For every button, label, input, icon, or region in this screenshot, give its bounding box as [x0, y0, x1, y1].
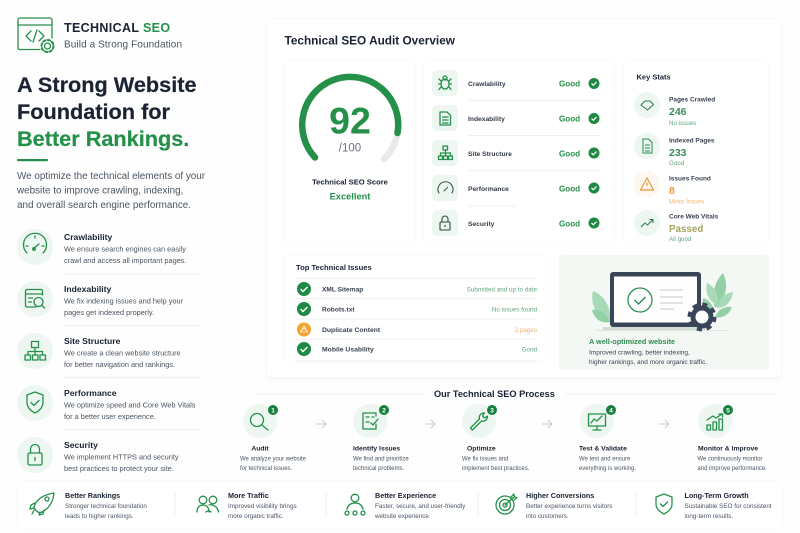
benefit: better experience: website experience.	[374, 513, 431, 520]
panel: score gauge: 92	[329, 100, 371, 142]
stat: pages crawled: 246	[669, 106, 687, 118]
feature: performance: Performance	[64, 388, 117, 398]
stat: core web vitals: All good	[669, 236, 692, 243]
step: audit: for technical issues.	[240, 466, 292, 472]
logo	[18, 18, 182, 52]
stat: core web vitals	[634, 210, 719, 243]
brand name: TECHNICAL SEO	[64, 21, 170, 35]
benefit: more traffic: Improved visibility brings	[228, 503, 297, 510]
row: security	[432, 210, 600, 236]
benefit: long-term growth: long-term results.	[684, 513, 733, 520]
benefit: long-term growth	[656, 491, 772, 520]
step: audit: We analyze your website	[240, 456, 307, 462]
heading: Foundation for	[17, 99, 171, 124]
row: site structure	[432, 140, 600, 166]
step: test and validate: Test & Validate	[579, 446, 627, 452]
step: identify issues: We find and prioritize	[353, 456, 409, 462]
issue: duplicate content	[297, 322, 537, 336]
panel: key stats: Key Stats	[636, 72, 671, 82]
step: optimize: implement best practices.	[462, 466, 530, 472]
step: identify issues: Identify Issues	[353, 446, 400, 452]
stat: pages crawled	[634, 92, 715, 127]
feature: performance	[17, 385, 196, 421]
step: test and validate: We test and ensure	[579, 456, 631, 462]
arrow	[425, 420, 435, 428]
feature: indexability: We fix indexing issues and help your	[64, 296, 184, 306]
stat: pages crawled: No issues	[669, 120, 696, 127]
row: performance	[432, 175, 600, 201]
issue: robots.txt: Robots.txt	[322, 306, 355, 314]
row: indexability: Good	[559, 114, 580, 124]
panel: well-optimized website	[559, 255, 769, 370]
stat: core web vitals: Passed	[669, 224, 703, 235]
panel: audit status list	[424, 61, 614, 245]
feature: site structure	[17, 333, 181, 369]
arrow	[542, 420, 552, 428]
issue: mobile usability	[297, 342, 537, 356]
benefit: better experience: Better Experience	[375, 491, 436, 500]
feature: crawlability: We ensure search engines can easily	[64, 244, 186, 254]
panel: score gauge: Excellent	[330, 192, 370, 202]
step: optimize	[462, 404, 530, 472]
stat: indexed pages: 233	[669, 147, 687, 159]
benefit: higher conversions: into customers.	[526, 513, 569, 520]
benefit: long-term growth: Sustainable SEO for consistent	[684, 503, 772, 510]
row: crawlability: Crawlability	[468, 81, 506, 88]
stat: indexed pages	[634, 133, 715, 167]
panel: top technical issues	[285, 255, 549, 362]
benefit: higher conversions	[496, 491, 612, 520]
panel: score gauge	[284, 61, 415, 245]
stat: core web vitals: Core Web Vitals	[669, 214, 719, 220]
issue: mobile usability: Mobile Usability	[322, 346, 374, 354]
panel: score gauge: /100	[339, 142, 361, 154]
gauge	[302, 77, 398, 159]
step: identify issues: technical problems.	[353, 466, 405, 472]
benefit: better rankings: Better Rankings	[65, 491, 120, 500]
row: site structure: Good	[559, 150, 580, 158]
benefit: better experience: Faster, secure, and user-friendly	[375, 503, 466, 510]
row: crawlability: Good	[559, 80, 580, 88]
stat: indexed pages: Indexed Pages	[669, 138, 715, 144]
feature: security	[17, 437, 179, 473]
feature: security: Security	[64, 440, 98, 450]
heading	[17, 72, 197, 151]
intro paragraph: website to improve crawling, indexing,	[16, 186, 183, 196]
audit title: Technical SEO Audit Overview	[284, 34, 456, 48]
panel: well-optimized website: Improved crawling, better indexing,	[589, 350, 690, 356]
heading underline	[17, 159, 48, 161]
illustration: leaves	[592, 273, 733, 322]
step: monitor and improve: 5	[726, 407, 730, 414]
benefit: more traffic: More Traffic	[228, 491, 269, 500]
step: test and validate	[579, 404, 636, 472]
step: monitor and improve: We continuously monitor	[698, 456, 762, 462]
panel: top technical issues: Top Technical Issues	[296, 263, 372, 272]
feature: crawlability: crawl and access all important pages.	[64, 256, 186, 265]
benefit: better rankings	[30, 491, 147, 520]
icon: code window with gear	[18, 18, 54, 52]
row: performance: Good	[559, 184, 580, 194]
intro paragraph: and overall search engine performance.	[17, 200, 191, 211]
issue: robots.txt	[297, 302, 537, 316]
stat: issues found: Minor Issues	[669, 198, 704, 206]
feature: crawlability: Crawlability	[64, 232, 112, 242]
feature: security: best practices to protect your site.	[64, 464, 174, 473]
feature: security: We implement HTTPS and security	[64, 452, 179, 462]
benefit: higher conversions: Higher Conversions	[526, 491, 594, 500]
stat: issues found: 8	[669, 185, 675, 197]
feature: indexability: Indexability	[64, 284, 111, 294]
feature: site structure: for better navigation and rankings.	[64, 360, 175, 369]
stat: issues found: Issues Found	[669, 176, 711, 182]
step: audit: 1	[271, 407, 275, 414]
benefits bar	[17, 481, 782, 528]
step: audit	[240, 404, 307, 472]
row: crawlability	[432, 70, 600, 96]
issue: robots.txt: No issues found	[492, 306, 537, 314]
issue: xml sitemap	[297, 282, 537, 296]
step: optimize: We fix issues and	[462, 456, 508, 462]
issue: duplicate content: Duplicate Content	[322, 327, 381, 334]
feature: crawlability	[17, 229, 186, 265]
issue: duplicate content: 2 pages	[515, 327, 537, 334]
illustration: laptop	[603, 272, 709, 330]
feature: site structure: Site Structure	[64, 336, 121, 346]
panel: key stats	[624, 61, 768, 245]
step: audit: Audit	[251, 446, 269, 452]
row: security: Security	[468, 221, 495, 228]
heading: Better Rankings.	[17, 126, 189, 151]
benefit: better experience	[345, 491, 466, 520]
feature: performance: for a better user experience.	[64, 412, 156, 421]
intro paragraph	[16, 171, 206, 211]
step: test and validate: 4	[609, 407, 613, 414]
tagline: Build a Strong Foundation	[64, 40, 182, 50]
stat: indexed pages: Good	[669, 160, 685, 167]
step: identify issues	[353, 404, 409, 472]
row: site structure: Site Structure	[468, 151, 512, 158]
issue: xml sitemap: XML Sitemap	[322, 286, 363, 294]
stat: issues found	[634, 171, 711, 206]
step: identify issues: 2	[382, 407, 386, 414]
issue: mobile usability: Good	[522, 346, 537, 354]
step: test and validate: everything is working.	[579, 466, 636, 472]
benefit: better rankings: leads to higher rankings.	[65, 513, 134, 520]
benefit: better rankings: Stronger technical foundation	[65, 503, 147, 510]
arrow	[316, 420, 326, 428]
feature: indexability: pages get indexed properly.	[64, 308, 154, 317]
panel: score gauge: Technical SEO Score	[312, 178, 388, 186]
stat: pages crawled: Pages Crawled	[669, 96, 715, 104]
panel: well-optimized website: A well-optimized website	[589, 337, 675, 346]
row: indexability: Indexability	[468, 116, 505, 123]
benefit: more traffic	[197, 491, 297, 520]
row: security: Good	[559, 220, 580, 228]
issue: xml sitemap: Submitted and up to date	[467, 286, 537, 294]
step: monitor and improve	[698, 404, 767, 472]
process heading: Our Technical SEO Process	[434, 389, 555, 399]
intro paragraph: We optimize the technical elements of your	[17, 171, 206, 182]
feature: site structure: We create a clean website structure	[64, 348, 181, 358]
feature: performance: We optimize speed and Core Web Vitals	[64, 400, 196, 410]
row: performance: Performance	[468, 186, 509, 193]
row: indexability	[432, 105, 600, 131]
arrow	[659, 420, 669, 428]
feature list	[17, 229, 196, 473]
heading: A Strong Website	[17, 72, 197, 97]
feature: indexability	[17, 281, 184, 317]
process steps	[240, 404, 767, 472]
benefit: more traffic: more organic traffic.	[228, 513, 284, 520]
benefit: higher conversions: Better experience turns visitors	[526, 503, 612, 510]
benefit: long-term growth: Long-Term Growth	[684, 491, 749, 500]
illustration: gear	[690, 304, 714, 330]
step: monitor and improve: Monitor & Improve	[698, 446, 758, 452]
step: monitor and improve: and improve performance.	[698, 466, 767, 472]
step: optimize: 3	[490, 407, 494, 414]
step: optimize: Optimize	[467, 446, 496, 452]
panel: well-optimized website: higher rankings, and more organic traffic.	[589, 359, 707, 366]
